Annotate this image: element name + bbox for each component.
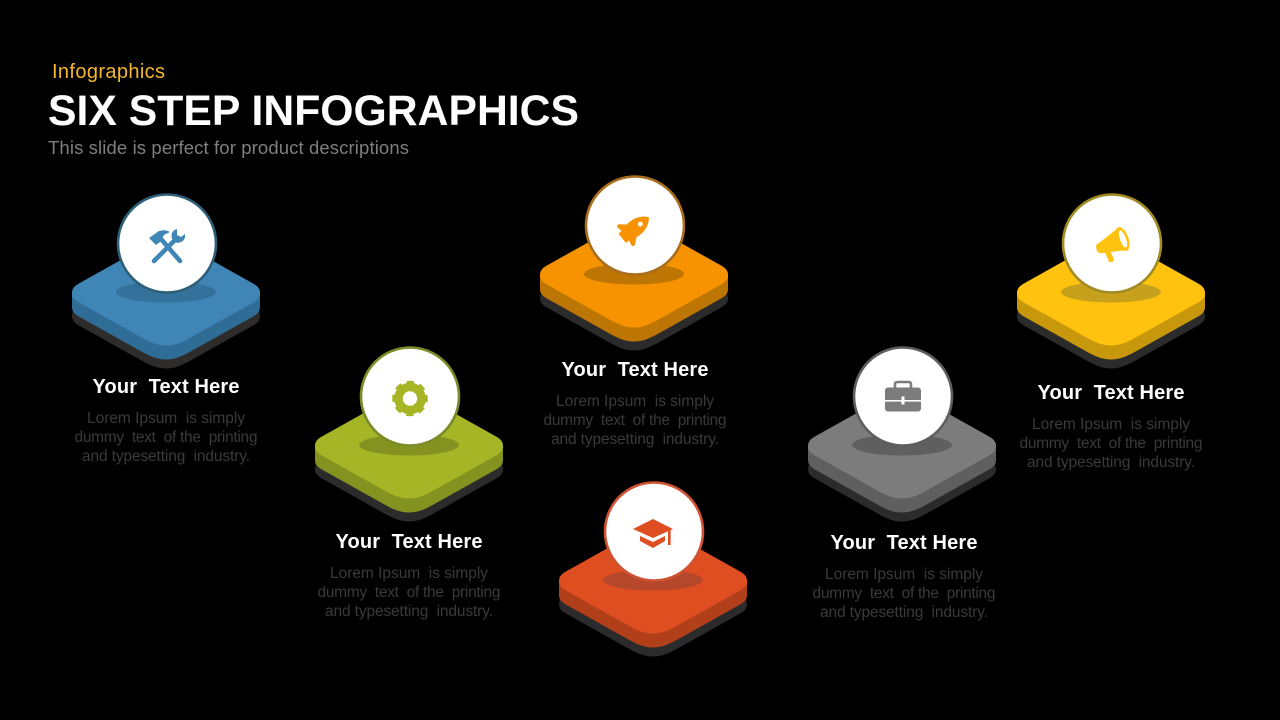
- step 3 text: Your Text Here: [562, 359, 708, 381]
- step 3 text: dummy text of the printing: [544, 412, 726, 429]
- step 6: yellow platform with megaphone icon: [1017, 194, 1205, 368]
- step 5 text: [812, 532, 996, 621]
- step 6 text: dummy text of the printing: [1020, 435, 1202, 452]
- step 1 text: Lorem Ipsum is simply: [87, 410, 245, 427]
- step 5 text: dummy text of the printing: [812, 585, 996, 602]
- step 2 text: [318, 531, 500, 620]
- step 4: red platform with graduation cap icon: [559, 482, 747, 656]
- icon: megaphone: [1096, 225, 1132, 262]
- step 1 text: [74, 376, 258, 465]
- icon: hammer and wrench: [149, 229, 185, 261]
- step 1 text: Your Text Here: [92, 376, 240, 398]
- step 2 text: Your Text Here: [336, 531, 482, 553]
- step 2 text: dummy text of the printing: [318, 584, 500, 601]
- icon: gear: [392, 380, 428, 417]
- step 1 text: dummy text of the printing: [74, 429, 258, 446]
- step 5 text: Lorem Ipsum is simply: [825, 566, 983, 583]
- icon: rocket: [614, 207, 657, 249]
- step 5 text: and typesetting industry.: [820, 604, 988, 621]
- icon: graduation cap: [633, 519, 673, 548]
- title: SIX STEP INFOGRAPHICS: [48, 87, 579, 135]
- step 5 text: Your Text Here: [830, 532, 978, 554]
- step 3 text: [544, 359, 726, 448]
- step 2: green platform with gear icon: [315, 348, 503, 522]
- step 1 text: and typesetting industry.: [82, 448, 250, 465]
- step 2 text: Lorem Ipsum is simply: [330, 565, 488, 582]
- step 6 text: Your Text Here: [1038, 382, 1184, 404]
- step 3 text: Lorem Ipsum is simply: [556, 393, 714, 410]
- eyebrow label: Infographics: [52, 61, 165, 83]
- step 6 text: and typesetting industry.: [1027, 454, 1195, 471]
- step 5: gray platform with briefcase icon: [808, 348, 996, 522]
- step 2 text: and typesetting industry.: [325, 603, 493, 620]
- subtitle: This slide is perfect for product descriptions: [48, 137, 409, 158]
- step 6 text: Lorem Ipsum is simply: [1032, 416, 1190, 433]
- step 3: orange platform with rocket icon: [540, 176, 728, 350]
- icon: briefcase: [885, 382, 921, 412]
- step 3 text: and typesetting industry.: [551, 431, 719, 448]
- step 1: blue platform with tools icon: [72, 194, 260, 368]
- step 6 text: [1020, 382, 1202, 471]
